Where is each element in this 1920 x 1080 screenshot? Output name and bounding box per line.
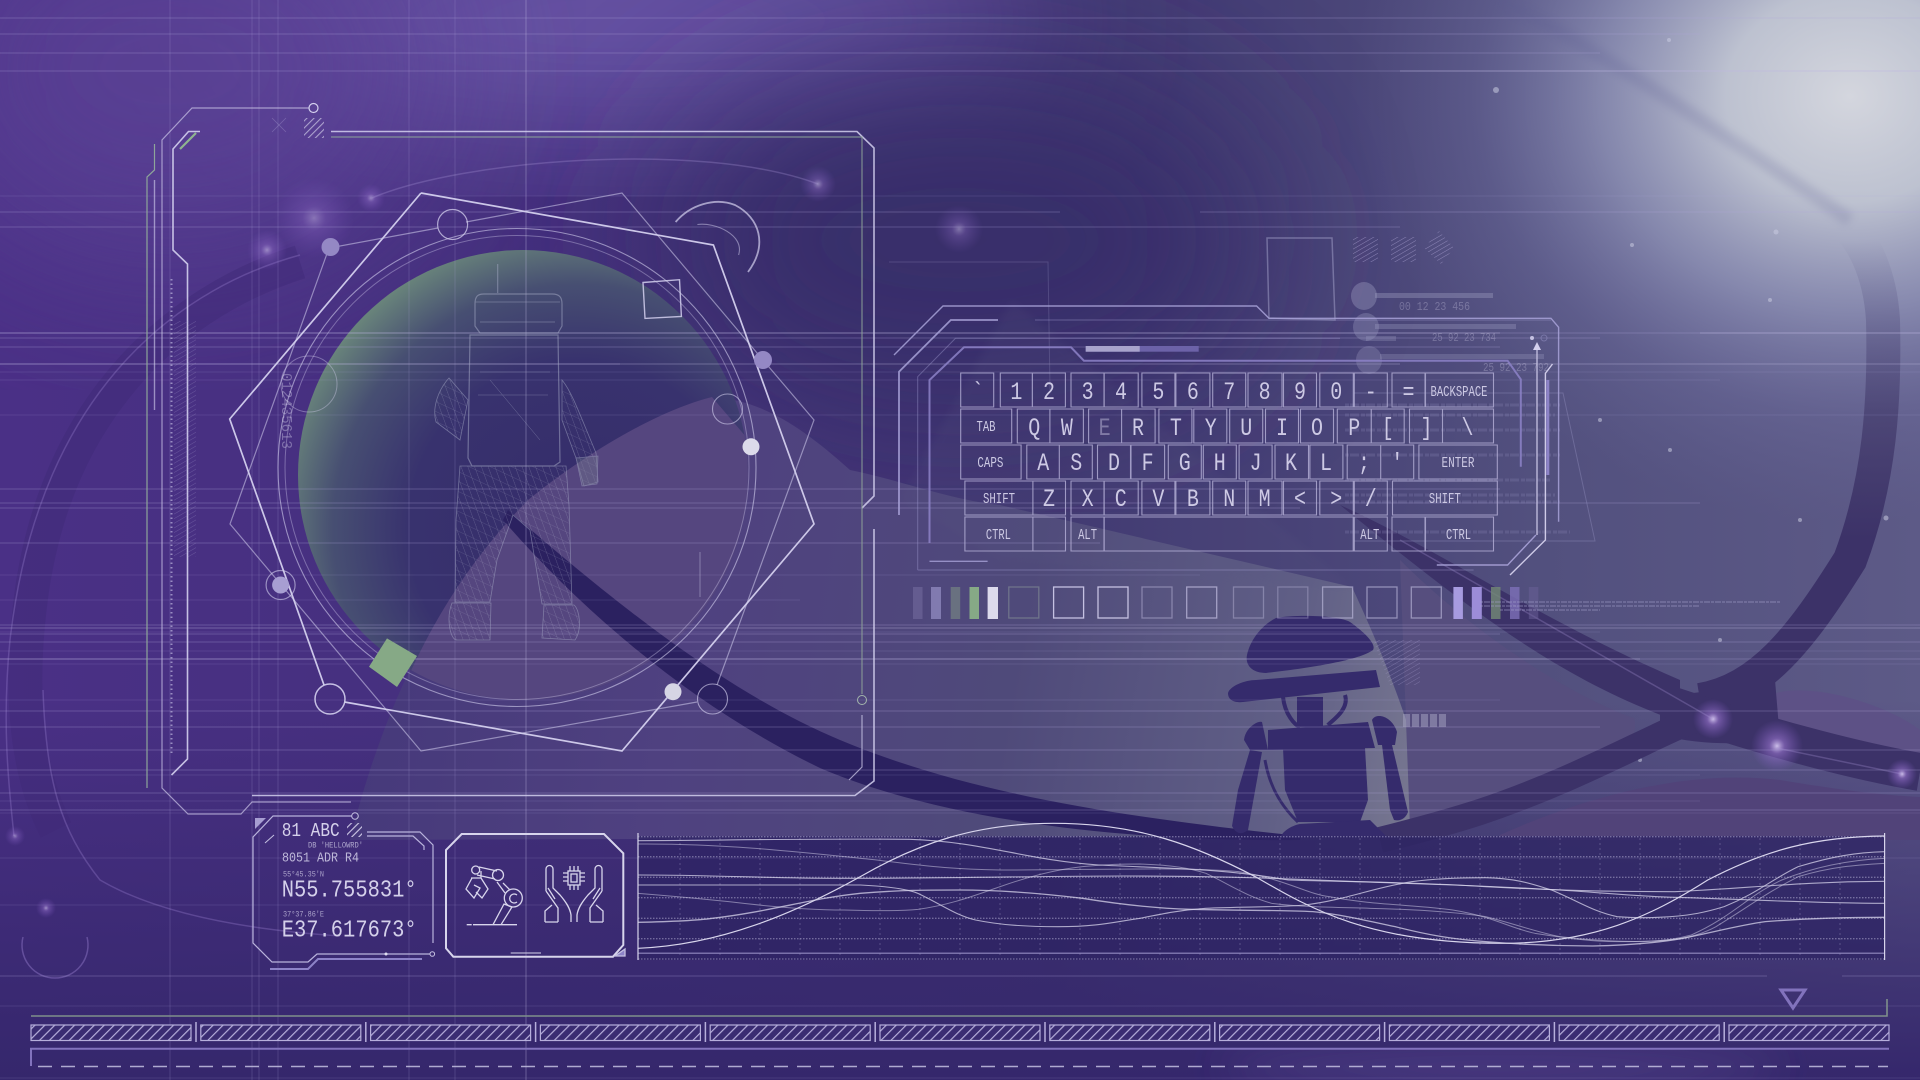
astronaut wireframe — [435, 264, 598, 640]
star specks on right side — [1493, 38, 1888, 762]
ASDF row: G — [1179, 449, 1191, 478]
dark diagonal rim band — [503, 510, 1300, 840]
number row: 4 — [1115, 378, 1127, 407]
swatch strip under keyboard — [913, 587, 1780, 619]
QWERTY row: E — [1099, 414, 1111, 443]
ZXCV row: N — [1223, 485, 1235, 514]
ZXCV row: C — [1115, 485, 1127, 514]
ZXCV row: / — [1365, 485, 1377, 514]
panel: coordinates readout: DB 'HELLOWRD' — [308, 842, 363, 851]
QWERTY row: T — [1170, 414, 1182, 443]
robot silhouette — [1228, 616, 1408, 838]
triangle marker — [1781, 990, 1805, 1008]
key outlines — [961, 373, 1497, 551]
QWERTY row: W — [1061, 414, 1073, 443]
panel: astronaut frame — [147, 104, 874, 814]
ZXCV row: M — [1259, 485, 1271, 514]
bottom key row: ALT — [1360, 527, 1379, 544]
number row: - — [1365, 378, 1377, 407]
bottom key row — [986, 527, 1471, 544]
icon: robot arm — [466, 866, 522, 925]
ASDF row: A — [1037, 449, 1049, 478]
ZXCV row — [983, 485, 1461, 514]
number row: 0 — [1330, 378, 1342, 407]
number row: 8 — [1259, 378, 1271, 407]
bottom key row: ALT — [1078, 527, 1097, 544]
ZXCV row: SHIFT — [1429, 491, 1461, 508]
ZXCV row: B — [1187, 485, 1199, 514]
panel: coordinates readout — [253, 813, 435, 969]
panel: coordinates readout: 55°45.35'N — [283, 871, 324, 880]
QWERTY row: Q — [1028, 414, 1040, 443]
green marker — [369, 638, 417, 687]
faint data windows behind keyboard — [889, 238, 1595, 541]
number row: 7 — [1223, 378, 1235, 407]
curve bright — [638, 823, 1885, 948]
rotated numeric label: 012435613 — [277, 373, 294, 449]
QWERTY row: O — [1311, 414, 1323, 443]
moon surface — [350, 300, 1436, 840]
panel: coordinates readout: E37.617673° — [282, 918, 417, 945]
number row: 5 — [1152, 378, 1164, 407]
ZXCV row: < — [1294, 485, 1306, 514]
QWERTY row: U — [1240, 414, 1252, 443]
QWERTY row: [ — [1382, 414, 1394, 443]
ASDF row: CAPS — [977, 455, 1003, 472]
chart: rotating heptagons and rings — [230, 193, 814, 751]
ZXCV row: > — [1330, 485, 1342, 514]
planet — [298, 250, 744, 700]
right lens panels and rim — [1340, 0, 1920, 840]
hatch and small bars beside robot — [1373, 640, 1446, 727]
panel: coordinates readout: 81 ABC — [282, 820, 340, 842]
ASDF row: ; — [1358, 449, 1370, 478]
ASDF row: H — [1214, 449, 1226, 478]
number row: ` — [972, 378, 984, 407]
chart backdrop — [638, 836, 1885, 960]
number row: 2 — [1043, 378, 1055, 407]
QWERTY row: I — [1276, 414, 1288, 443]
ASDF row: L — [1320, 449, 1332, 478]
slider widgets with faint numbers: 00 12 23 456 — [1399, 300, 1470, 314]
number row: 6 — [1187, 378, 1199, 407]
ASDF row: K — [1285, 449, 1297, 478]
number row: = — [1402, 378, 1414, 407]
bottom key row: CTRL — [1446, 527, 1471, 544]
number row — [972, 378, 1488, 407]
bottom progress stripes — [31, 999, 1889, 1066]
slider widgets with faint numbers: 25 92 23 792 — [1483, 361, 1549, 375]
QWERTY row: P — [1348, 414, 1360, 443]
ASDF row: F — [1142, 449, 1154, 478]
ASDF row: ENTER — [1442, 455, 1474, 472]
number row: 9 — [1294, 378, 1306, 407]
bottom key row: CTRL — [986, 527, 1011, 544]
ZXCV row: Z — [1043, 485, 1055, 514]
number row: BACKSPACE — [1430, 384, 1488, 401]
bright polygon — [230, 193, 814, 751]
ZXCV row: SHIFT — [983, 491, 1015, 508]
slider widgets with faint numbers — [1351, 231, 1549, 375]
ASDF row: ' — [1391, 449, 1403, 478]
QWERTY row: ] — [1420, 414, 1432, 443]
QWERTY row: TAB — [976, 419, 996, 436]
ASDF row: D — [1108, 449, 1120, 478]
QWERTY row: Y — [1205, 414, 1217, 443]
QWERTY row: R — [1132, 414, 1144, 443]
panel: robotics icons — [446, 834, 625, 957]
ZXCV row: X — [1082, 485, 1094, 514]
ASDF row — [977, 449, 1474, 478]
ASDF row: S — [1070, 449, 1082, 478]
ASDF row: J — [1250, 449, 1262, 478]
slider widgets with faint numbers: 25 92 23 734 — [1432, 331, 1496, 345]
panel: keyboard frame — [894, 306, 1559, 575]
panel: coordinates readout: 37°37.86'E — [283, 911, 324, 920]
panel: coordinates readout: 8051 ADR R4 — [282, 851, 359, 867]
chart: waveform lines — [638, 823, 1885, 960]
QWERTY row — [976, 414, 1474, 443]
number row: 1 — [1010, 378, 1022, 407]
panel: coordinates readout: N55.755831° — [282, 878, 417, 905]
left glasses rim arc — [6, 255, 340, 978]
icon: hands holding chip — [545, 866, 603, 922]
light glows — [5, 159, 1917, 918]
ZXCV row: V — [1152, 485, 1164, 514]
number row: 3 — [1082, 378, 1094, 407]
keyboard keys — [961, 373, 1497, 551]
QWERTY row: \ — [1462, 414, 1474, 443]
